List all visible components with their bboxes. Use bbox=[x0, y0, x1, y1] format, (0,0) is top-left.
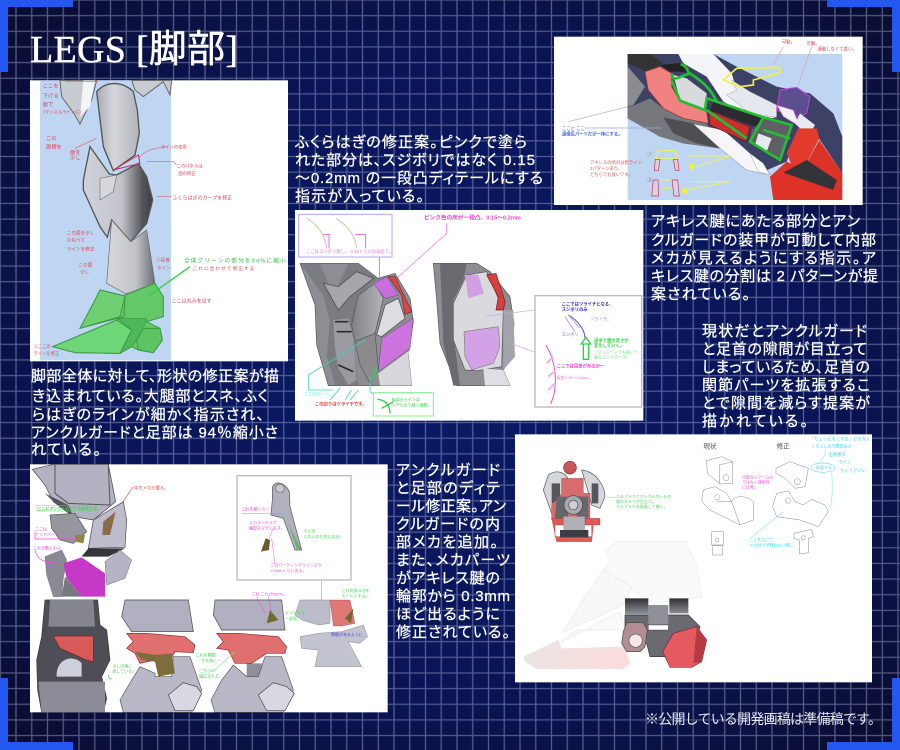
panel: ankle guard and foot detail sheet: これ これが000%。 bbox=[252, 590, 287, 596]
handwritten notes: この bbox=[46, 135, 57, 142]
whole leg silhouette bbox=[628, 54, 842, 173]
text block: leg overview: き込まれている。大腿部とスネ、ふく bbox=[32, 388, 268, 405]
panel: achilles and ankle guard sheet: 可動。 bbox=[807, 40, 820, 47]
text block: ankle guard note: クルガードの内 bbox=[396, 516, 500, 533]
panel: ankle guard and foot detail sheet: ここは bbox=[35, 527, 47, 532]
text block: calf correction: れた部分は、スジボリではなく 0.15 bbox=[295, 152, 535, 169]
text block: ankle guard note: 輪郭から 0.3mm bbox=[396, 588, 510, 605]
top right sketches: 現状 bbox=[703, 441, 717, 450]
text block: ankle guard note: また、メカパーツ bbox=[396, 552, 510, 569]
handwritten notes: ラインを修正 bbox=[33, 350, 60, 357]
text block: ankle guard note: ほど出るように bbox=[396, 606, 500, 623]
panel: ankle guard and foot detail sheet: ここにアンクルのマグネ形状です。 bbox=[38, 505, 101, 511]
panel: ankle guard and foot detail sheet: これを開くと一 bbox=[242, 506, 270, 512]
panel: ankle guard and foot detail sheet: 延している。 bbox=[112, 668, 136, 674]
handwritten notes: この面を少し bbox=[67, 229, 95, 236]
red panels bbox=[645, 67, 708, 123]
top view mech bbox=[543, 472, 568, 513]
handwritten notes: 少し bbox=[70, 153, 81, 161]
left calf bbox=[300, 263, 413, 386]
text block: ankle gap note: 関節パーツを拡張するこ bbox=[702, 377, 870, 394]
text block: achilles note: キレス腱の分割は 2 パターンが提 bbox=[651, 268, 878, 285]
text block: ankle gap note: と足首の隙間が目立って bbox=[702, 341, 867, 358]
panel: ankle guard and foot detail sheet: 隙間があるように bbox=[331, 631, 363, 637]
handwritten notes: ラインを修正 bbox=[67, 246, 95, 253]
panel: ankle joint expansion sheet: ウルプメカとアンクルガードの bbox=[616, 493, 671, 499]
panel: full leg correction sheet: 全体グリーンの部分を94%に縮小 bbox=[184, 257, 286, 265]
text block: leg overview: アンクルガードと足部は 94％縮小さ bbox=[31, 424, 278, 442]
panel: ankle joint expansion sheet: くるぶしの円筒部品の bbox=[812, 443, 851, 449]
green foot bbox=[53, 283, 163, 353]
panel: ankle joint expansion sheet bbox=[515, 434, 872, 682]
dark mech bbox=[625, 615, 700, 657]
panel: ankle guard and foot detail sheet: 少し内側に bbox=[112, 662, 132, 668]
left grey armour bbox=[628, 67, 645, 107]
text block: achilles note: 案されている。 bbox=[651, 286, 750, 303]
panel: ankle joint expansion sheet: に比喩。 bbox=[742, 483, 758, 489]
panel: ankle joint expansion sheet: 「ちょっとをくすま」かせなく bbox=[810, 435, 871, 442]
panel: achilles and ankle guard sheet: ① bbox=[647, 151, 652, 158]
text block: achilles note: クルガードの装甲が可動して内部 bbox=[651, 232, 876, 249]
panel: ankle guard and foot detail sheet: こちらの bbox=[199, 667, 215, 673]
handwritten notes: 少し bbox=[80, 268, 90, 275]
panel: calf correction sheet: シアと合う様上線衝。 bbox=[392, 402, 431, 408]
handwritten notes: この面 bbox=[78, 263, 93, 269]
handwritten notes: ひねって bbox=[67, 238, 85, 244]
panel: ankle guard and foot detail sheet: これ内部メカを bbox=[342, 587, 370, 593]
panel: ankle guard and foot detail sheet: これが動くのは bbox=[33, 544, 61, 550]
text block: ankle guard note bbox=[396, 462, 510, 641]
panel: achilles and ankle guard sheet: アキレスの所の分割ライン bbox=[590, 159, 642, 166]
green outlines bbox=[672, 64, 792, 160]
footnote: ※公開している開発画稿は準備稿です。 bbox=[645, 711, 882, 727]
panel: ankle guard and foot detail sheet: こちらの口先になる。 bbox=[304, 533, 344, 539]
panel: ankle joint expansion sheet: メカ同士が触れない様に。 bbox=[749, 541, 797, 547]
handwritten notes: ここは丸みを出す bbox=[172, 298, 212, 305]
handwritten notes: 下げる bbox=[43, 91, 59, 99]
top-left lower leg bbox=[32, 464, 116, 520]
panel: calf correction sheet: 途中で面の高さが bbox=[594, 337, 629, 344]
text block: ankle gap note: 現状だとアンクルガード bbox=[702, 323, 867, 340]
panel: achilles and ankle guard sheet: 2パターンあり。 bbox=[590, 165, 622, 172]
panel: ankle guard and foot detail sheet: する為に一 bbox=[201, 657, 221, 663]
panel: calf correction sheet: 変化していく。 bbox=[594, 342, 624, 349]
panel: achilles and ankle guard sheet: 速吸気パーツだが一体にする。 bbox=[562, 130, 623, 137]
panel: ankle guard and foot detail sheet: 0.3mmくらい出る。 bbox=[270, 567, 306, 573]
panel: achilles and ankle guard sheet: ② bbox=[647, 177, 652, 184]
handwritten notes: ①足首 bbox=[156, 257, 170, 264]
panel: ankle guard and foot detail sheet: 一部面 bbox=[285, 616, 297, 621]
panel: ankle guard and foot detail sheet: 幅広まれる。 bbox=[199, 672, 223, 678]
text block: achilles note: アキレス腱にあたる部分とアン bbox=[651, 213, 860, 230]
panel: calf correction sheet: （エッジーンでも良いで bbox=[594, 349, 638, 355]
panel: ankle guard and foot detail sheet: これを開閉 bbox=[196, 652, 216, 658]
red heel and toe bbox=[787, 128, 819, 169]
panel: calf correction sheet: スジボリ bbox=[561, 331, 579, 337]
handwritten notes: 面積を bbox=[46, 142, 62, 150]
detail box bbox=[535, 296, 642, 407]
inset box bbox=[237, 476, 351, 580]
panel: ankle guard and foot detail sheet: モールドする。 bbox=[342, 592, 370, 598]
panel: ankle guard and foot detail sheet bbox=[30, 464, 388, 712]
bottom strip figures bbox=[37, 600, 110, 712]
annotations: 可動。 bbox=[782, 38, 795, 45]
panel: full leg correction sheet bbox=[30, 80, 288, 361]
handwritten notes: ここを bbox=[43, 82, 59, 89]
text block: calf correction: ～0.2mm の一段凸ディテールにする bbox=[295, 169, 543, 187]
panel: ankle guard and foot detail sheet: クリアパーツ bbox=[35, 531, 59, 537]
right calf bbox=[433, 263, 514, 386]
panel: achilles and ankle guard sheet: 連動しなくて良い。 bbox=[818, 46, 856, 53]
panel: calf correction sheet: 段差0.15～0.2mm。 bbox=[557, 374, 593, 380]
panel: ankle joint expansion sheet: ウルブメカを拡張して縮く。 bbox=[616, 503, 668, 509]
panel: calf correction sheet bbox=[295, 210, 643, 421]
text block: leg overview: 脚部全体に対して、形状の修正案が描 bbox=[31, 368, 279, 385]
panel: full leg correction sheet: これに合わせて修正する bbox=[193, 265, 254, 272]
handwritten notes: このパネルは bbox=[177, 163, 203, 169]
panel: ankle joint expansion sheet: ちょうどいい bbox=[840, 467, 866, 474]
text block: ankle gap note: 描かれている。 bbox=[702, 413, 808, 430]
shin bbox=[107, 220, 155, 294]
text block: leg overview: らはぎのラインが細かく指示され、 bbox=[32, 406, 264, 424]
text block: ankle gap note: とで隙間を減らす提案が bbox=[702, 395, 870, 412]
centre mech bbox=[750, 117, 793, 160]
text block: ankle guard note: 部メカを追加。 bbox=[396, 534, 498, 551]
panel: ankle joint expansion sheet: 修正 bbox=[777, 441, 790, 450]
panel: calf correction sheet: この辺りはツライチです。 bbox=[315, 400, 367, 407]
text block: leg overview bbox=[31, 368, 279, 458]
text block: achilles note: メカが見えるようにする指示。ア bbox=[651, 250, 876, 267]
text block: ankle guard note: アンクルガード bbox=[396, 462, 500, 479]
panel: calf correction sheet: スジボリのみ bbox=[562, 306, 588, 313]
hip armour bbox=[60, 80, 172, 124]
panel: achilles and ankle guard sheet: ここと ここ bbox=[562, 126, 585, 131]
text block: calf correction: ふくらはぎの修正案。ピンクで塗ら bbox=[294, 134, 527, 151]
panel: ankle joint expansion sheet: ライン bbox=[838, 459, 851, 465]
handwritten notes: ライン bbox=[157, 265, 171, 271]
panel: achilles and ankle guard sheet: どちらでも良いです。 bbox=[590, 171, 633, 178]
handwritten notes: 面を bbox=[70, 149, 81, 156]
text block: calf correction bbox=[294, 134, 543, 205]
annotation lines bbox=[65, 82, 177, 197]
panel: ankle joint expansion sheet: 出張感の bbox=[828, 451, 846, 458]
white armour band bbox=[678, 54, 777, 120]
handwritten notes: 面で bbox=[43, 101, 53, 108]
panel: ankle joint expansion sheet: 間のスキマが目立つ。 bbox=[616, 498, 656, 504]
panel: calf correction sheet: ここではツライチとなる、 bbox=[562, 301, 613, 308]
thigh bbox=[97, 84, 139, 171]
purple ankle part bbox=[777, 87, 810, 118]
title: LEGS [脚部] bbox=[30, 29, 238, 71]
text block: ankle guard note: がアキレス腱の bbox=[396, 570, 500, 587]
panel: achilles and ankle guard sheet bbox=[554, 37, 863, 205]
panel: ankle joint expansion sheet: ではなく連続性 bbox=[742, 478, 770, 484]
handwritten notes: 面の修正 bbox=[178, 170, 196, 177]
handwritten notes: ③ここの bbox=[33, 343, 51, 350]
text block: ankle gap note: しまっているため、足首の bbox=[702, 359, 870, 376]
panel: ankle guard and foot detail sheet: このパーティングラインより bbox=[270, 562, 322, 568]
panel: ankle joint expansion sheet: ここを広げて bbox=[749, 536, 773, 542]
text block: ankle gap note bbox=[702, 323, 870, 430]
panel: ankle guard and foot detail sheet: その次 bbox=[304, 528, 316, 534]
text block: leg overview: れている。 bbox=[31, 442, 101, 458]
white lower armour bbox=[693, 124, 770, 174]
text block: ankle guard note: 修正されている。 bbox=[396, 624, 510, 641]
panel: ankle joint expansion sheet: 拡張する bbox=[816, 464, 832, 470]
handwritten notes: ラインの変更 bbox=[161, 143, 188, 150]
handwritten notes: (マッスルラインに) bbox=[43, 109, 81, 115]
panel: calf correction sheet: 面のコントロール） bbox=[594, 355, 630, 360]
panel: calf correction sheet: ここはスジボリ無し。 0.15くらいの段差で。 bbox=[306, 248, 393, 255]
panel: calf correction sheet: ツライチ。 bbox=[590, 317, 611, 323]
handwritten notes: ふくらはぎのカーブを修正 bbox=[173, 194, 232, 201]
callout text: ピンク色の所が一段凸。0.15～0.2mm bbox=[424, 213, 521, 221]
panel: ankle guard and foot detail sheet: 種部はマグします。 bbox=[249, 524, 284, 530]
panel: calf correction sheet: ここでは段差があるか一 bbox=[557, 363, 605, 370]
panel: ankle guard and foot detail sheet: 中のメカが覆る。 bbox=[134, 484, 169, 491]
panel: ankle guard and foot detail sheet: エッジメカ bbox=[285, 610, 305, 615]
panel: ankle guard and foot detail sheet: メカラートルで bbox=[249, 519, 277, 525]
bottom notes: ここはエッジ。 bbox=[304, 391, 332, 396]
panel: calf correction sheet: 緑部分ラインは bbox=[392, 396, 420, 402]
text block: ankle guard note: と足部のディテ bbox=[396, 479, 500, 497]
text block: calf correction: 指示が入っている。 bbox=[295, 188, 424, 205]
calf armour bbox=[83, 147, 153, 242]
inset box bbox=[299, 214, 392, 257]
side view ghost foot bbox=[603, 542, 702, 603]
handwritten notes bbox=[33, 82, 232, 357]
text block: ankle guard note: ール修正案。アン bbox=[396, 498, 506, 515]
text block: achilles note bbox=[651, 213, 878, 303]
panel: ankle joint expansion sheet: 可能ならアームも bbox=[742, 473, 774, 479]
